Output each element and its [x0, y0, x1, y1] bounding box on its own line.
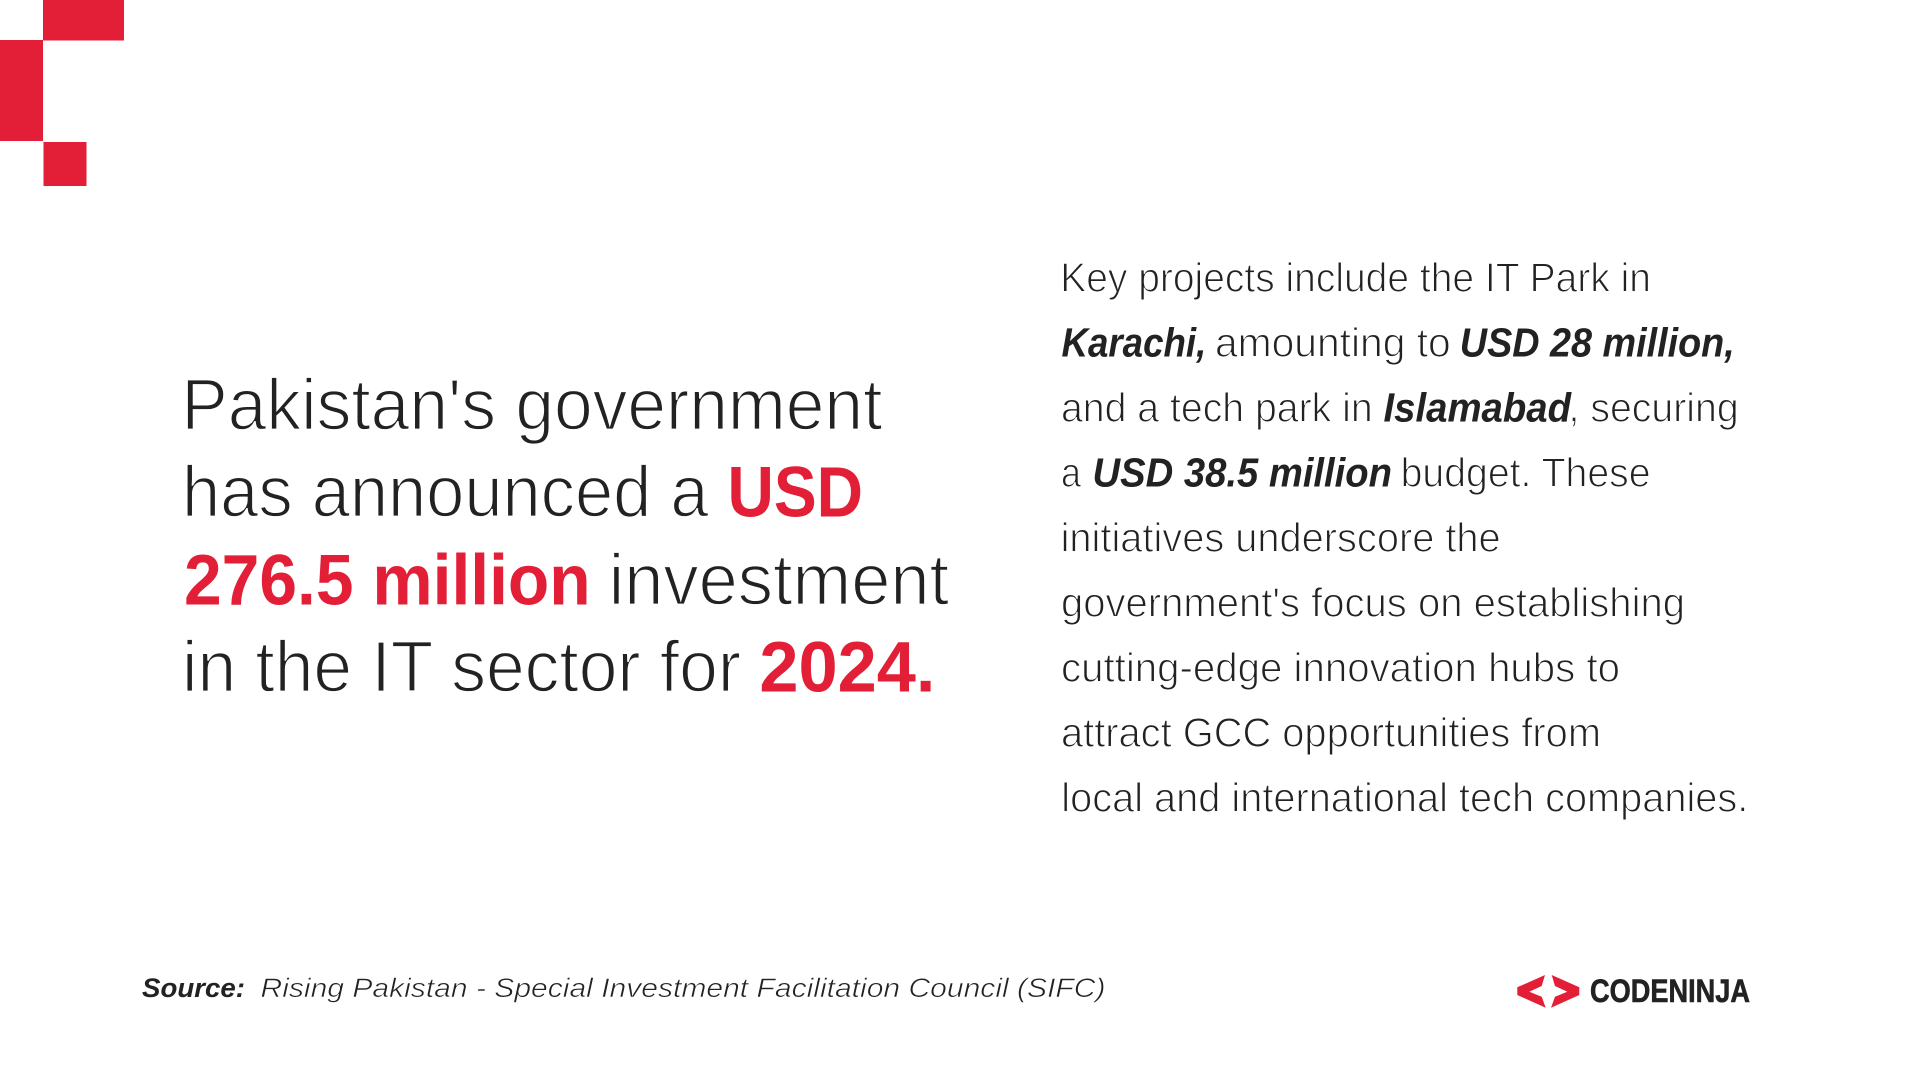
headline — [181, 365, 949, 708]
headline line 3: 276.5 million — [184, 541, 591, 620]
body paragraph: key projects: budget. These — [1401, 450, 1651, 496]
logo wordmark: CODENINJA — [1590, 973, 1750, 1009]
logo: Codeninja — [1517, 973, 1750, 1009]
body paragraph: key projects: and a tech park in — [1061, 385, 1373, 431]
headline line 3: investment — [609, 540, 949, 620]
headline line 1: Pakistan's government — [181, 365, 882, 445]
body paragraph: key projects: Key projects include the IT Park in — [1060, 255, 1651, 301]
body paragraph: key projects: USD 28 million, — [1460, 320, 1735, 366]
body paragraph: key projects: USD 38.5 million — [1092, 450, 1392, 496]
body paragraph: key projects: amounting to — [1215, 320, 1451, 366]
headline line 4: 2024. — [759, 629, 935, 708]
decorative red pixel blocks — [0, 0, 124, 186]
headline line 2: USD — [728, 454, 863, 533]
body paragraph: key projects — [1060, 255, 1748, 821]
headline line 2: has announced a — [182, 453, 709, 533]
body paragraph: key projects: , securing — [1568, 385, 1739, 431]
headline line 3 — [184, 540, 949, 620]
body paragraph: key projects: cutting-edge innovation hubs to — [1061, 645, 1620, 691]
source citation: Rising Pakistan - Special Investment Facilitation Council (SIFC) — [260, 973, 1106, 1003]
body paragraph: key projects: local and international tech companies. — [1061, 775, 1748, 821]
headline line 4: in the IT sector for — [182, 628, 741, 708]
body paragraph: key projects: initiatives underscore the — [1061, 515, 1501, 561]
body paragraph: key projects: attract GCC opportunities from — [1061, 710, 1601, 756]
body paragraph: key projects: a — [1061, 450, 1081, 496]
source citation: Source: — [142, 973, 245, 1003]
body paragraph: key projects: Karachi, — [1062, 320, 1206, 366]
body paragraph: key projects: Islamabad — [1384, 385, 1572, 431]
body paragraph: key projects: government's focus on establishing — [1061, 580, 1685, 626]
icon: red chevrons — [1517, 975, 1579, 1008]
